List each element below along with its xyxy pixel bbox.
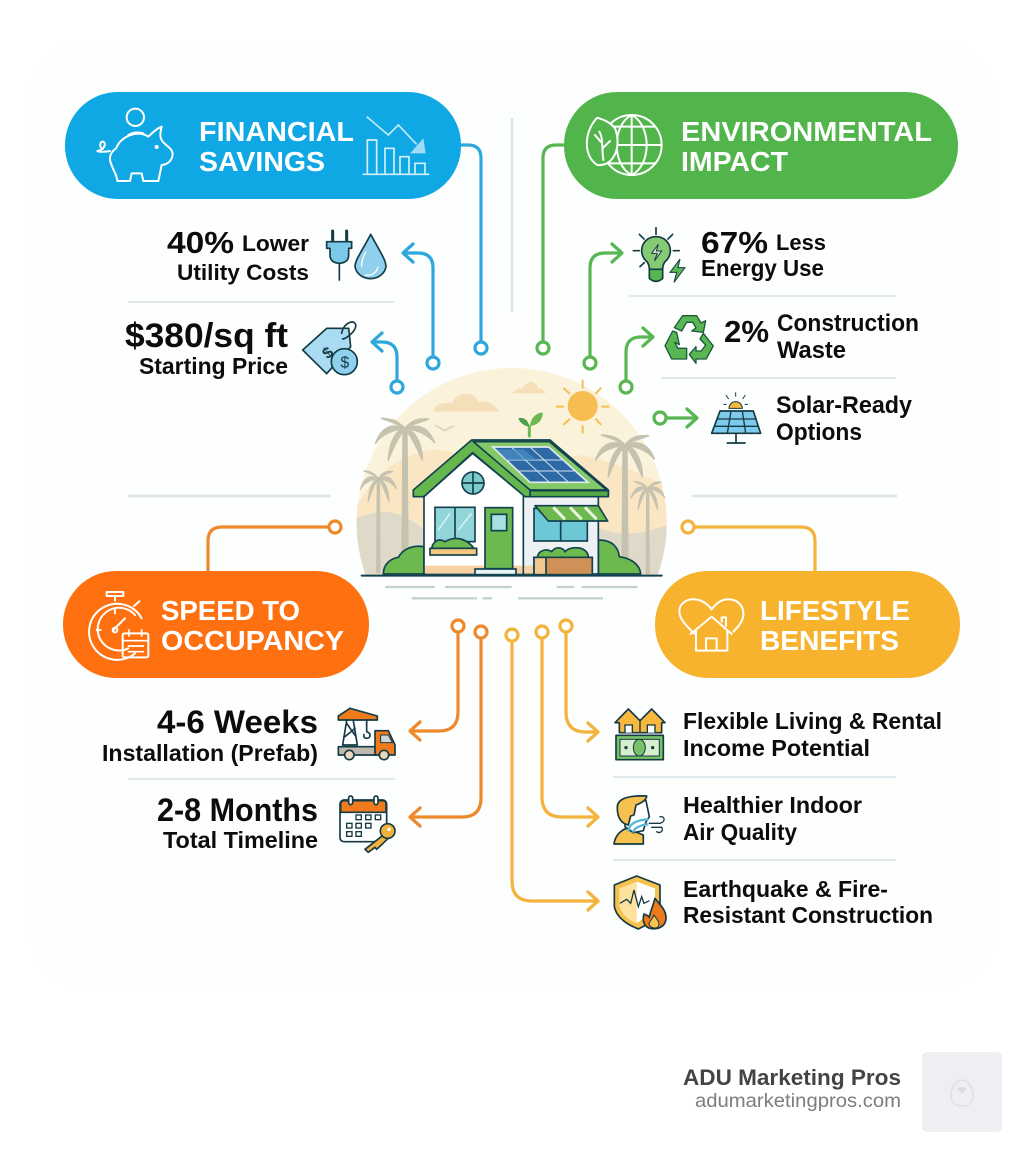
heading text: financial savings: FINANCIAL (199, 116, 354, 147)
stat: 4-6 weeks installation: Installation (Prefab) (102, 740, 318, 766)
stat: 67% less energy use: 67% (701, 225, 768, 260)
icon: light bulb (633, 228, 685, 282)
stat: 2% construction waste (724, 310, 919, 364)
footer brand text: adumarketingpros.com (695, 1090, 901, 1112)
divider (613, 859, 896, 861)
heading text: speed to occupancy (161, 595, 344, 656)
text: flexible living and rental income: Flexible Living & Rental (683, 708, 942, 734)
heading pill: financial savings (65, 92, 461, 199)
window box (430, 538, 477, 555)
stat: solar-ready options: Solar-Ready (776, 392, 913, 419)
text: healthier indoor air quality (683, 792, 862, 845)
text: healthier indoor air quality: Healthier Indoor (683, 792, 862, 818)
palm trees (360, 418, 665, 574)
stat: 4-6 weeks installation: 4-6 Weeks (157, 704, 318, 740)
stat: 2% construction waste: Construction (777, 310, 919, 337)
round window (462, 472, 484, 494)
text: earthquake and fire resistant construction: Resistant Construction (683, 902, 933, 928)
text: earthquake and fire resistant construction (683, 876, 933, 928)
icon: piggy bank (97, 109, 173, 181)
heading text: environmental impact (681, 116, 932, 177)
heading pill: environmental impact (564, 92, 958, 199)
sky circle (356, 368, 667, 575)
stat: 40% lower utility costs: 40% (167, 225, 234, 260)
icon: price tag (303, 322, 357, 375)
divider (128, 778, 395, 780)
ground line (362, 573, 662, 579)
stat: 67% less energy use: Less (776, 230, 826, 255)
heading text: lifestyle benefits: BENEFITS (760, 625, 899, 656)
bird (436, 426, 453, 431)
stat: $380 per sq ft starting price: $380/sq ft (125, 317, 288, 355)
connectors: environmental impact (537, 145, 697, 427)
connectors: financial savings (372, 145, 487, 393)
divider (629, 295, 896, 297)
icon: shield with fire (614, 876, 666, 929)
clouds (433, 382, 546, 412)
heading text: financial savings (199, 116, 354, 177)
icon: plug and water drop (327, 231, 386, 280)
text: flexible living and rental income: Income Potential (683, 735, 870, 761)
roof (413, 440, 608, 497)
stat: 67% less energy use: Energy Use (701, 255, 824, 281)
icon: recycle arrows (665, 316, 713, 363)
sprout (518, 412, 543, 437)
stat: 2% construction waste: 2% (724, 314, 769, 349)
panel: environmental impact (537, 92, 958, 446)
door (475, 508, 516, 575)
stat: 40% lower utility costs: Utility Costs (177, 260, 309, 285)
footer brand text (683, 1065, 901, 1112)
icon: globe and leaf (587, 115, 662, 175)
divider (613, 776, 896, 778)
awning (535, 506, 608, 521)
divider (661, 377, 896, 379)
stat: 4-6 weeks installation (102, 704, 318, 766)
icon: heart and house (679, 599, 743, 651)
heading text: speed to occupancy: SPEED TO (161, 595, 300, 626)
heading text: lifestyle benefits (760, 595, 910, 656)
stat: 2% construction waste: Waste (777, 337, 846, 364)
sun (557, 381, 609, 433)
stat: 40% lower utility costs (167, 225, 309, 285)
stat: $380 per sq ft starting price: Starting Price (139, 353, 288, 379)
heading pill: speed to occupancy (63, 571, 369, 678)
planter (534, 548, 592, 575)
icon: price tag: $ (319, 344, 337, 363)
house walls (424, 453, 598, 574)
icon: solar panel (712, 392, 761, 443)
bushes (383, 540, 641, 574)
footer brand text: ADU Marketing Pros (683, 1065, 901, 1090)
icon: crane truck (338, 708, 395, 760)
icon: stopwatch and calendar (89, 592, 148, 660)
heading pill: lifestyle benefits (655, 571, 960, 678)
stat: 2-8 months total timeline: Total Timeline (163, 827, 318, 853)
central house illustration (350, 360, 680, 598)
icon: houses and money (615, 709, 665, 760)
heading text: environmental impact: ENVIRONMENTAL (681, 116, 932, 147)
solar panel (493, 447, 588, 482)
icon: person breathing clean air (614, 796, 664, 844)
divider (128, 301, 394, 303)
heading text: financial savings: SAVINGS (199, 146, 325, 177)
heading text: lifestyle benefits: LIFESTYLE (760, 595, 910, 626)
connectors: speed to occupancy (208, 521, 487, 826)
panel: speed to occupancy (63, 521, 487, 853)
stat: solar-ready options (776, 392, 913, 446)
text: flexible living and rental income (683, 708, 942, 761)
stat: 67% less energy use (701, 225, 826, 281)
panel: financial savings (65, 92, 487, 393)
icon: falling bar chart (363, 117, 429, 174)
panel: lifestyle benefits (506, 521, 960, 929)
stat: 2-8 months total timeline (157, 792, 318, 853)
text: healthier indoor air quality: Air Quality (683, 819, 797, 845)
stat: 40% lower utility costs: Lower (242, 231, 309, 256)
front window (435, 507, 475, 542)
stat: solar-ready options: Options (776, 419, 862, 446)
road dashes (386, 587, 637, 598)
icon: calendar and key (340, 796, 395, 852)
stat: 2-8 months total timeline: 2-8 Months (157, 792, 318, 828)
side window (534, 508, 587, 541)
stat: $380 per sq ft starting price (125, 317, 288, 379)
text: earthquake and fire resistant construction: Earthquake & Fire- (683, 876, 888, 902)
connectors: lifestyle benefits (506, 521, 815, 910)
footer logo placeholder (922, 1052, 1002, 1132)
heading text: speed to occupancy: OCCUPANCY (161, 625, 344, 656)
icon: price tag: $ (340, 355, 349, 372)
heading text: environmental impact: IMPACT (681, 146, 788, 177)
